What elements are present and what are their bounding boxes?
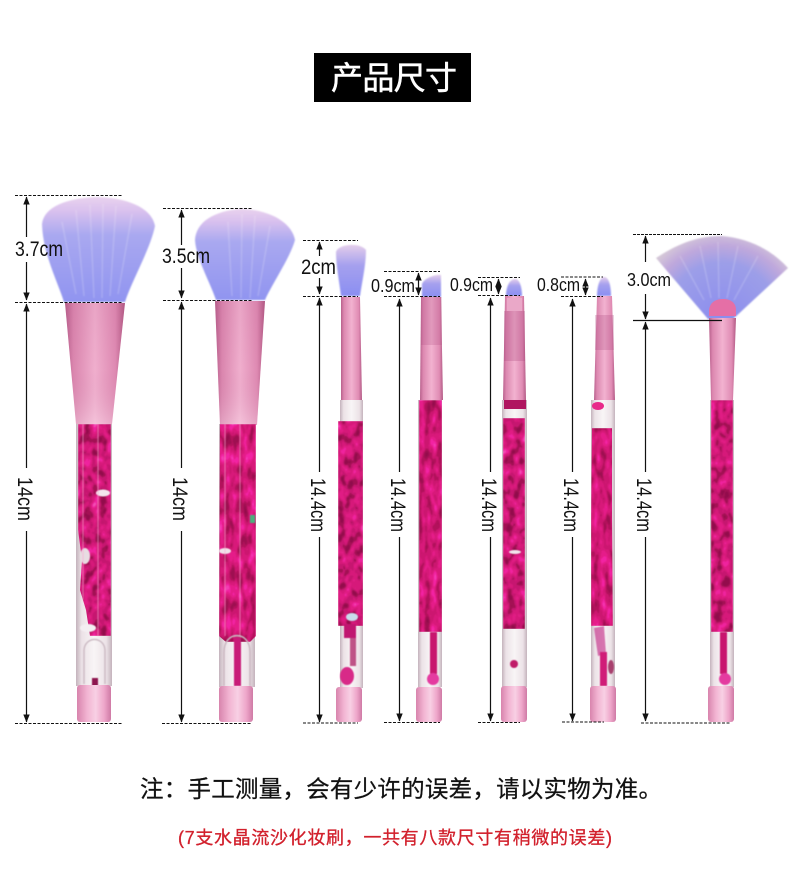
handle ferrule 1 xyxy=(65,303,125,424)
label 0.8cm: 0.8cm xyxy=(537,275,580,295)
brush 3: tapered brush xyxy=(336,245,366,722)
glitter tube 1 xyxy=(76,424,112,686)
brush 5: angled eye brush xyxy=(501,279,527,722)
handle ferrule 4 xyxy=(420,297,443,400)
handle ferrule 3 xyxy=(341,297,362,400)
glitter tube 3 xyxy=(338,400,363,688)
glitter tube 5 xyxy=(502,400,527,687)
end cap 2 xyxy=(219,686,253,722)
handle ferrule 5 xyxy=(503,296,526,400)
label 3.7cm: 3.7cm xyxy=(15,238,63,261)
glitter tube 4 xyxy=(418,400,442,687)
bristles 2 xyxy=(195,209,295,300)
glitter tube 7 xyxy=(710,400,734,687)
label 0.9cm: 0.9cm xyxy=(371,276,415,296)
fan ferrule xyxy=(709,318,736,400)
end cap 6 xyxy=(590,686,616,722)
dimension 3 xyxy=(301,240,358,723)
title xyxy=(314,53,471,102)
end cap 1 xyxy=(77,685,111,722)
glitter tube 6 xyxy=(591,400,615,687)
end cap 7 xyxy=(708,686,734,722)
label 14.4cm: 14.4cm xyxy=(386,478,409,532)
dimension 7 xyxy=(627,234,730,723)
red note text: (7支水晶流沙化妆刷，一共有八款尺寸有稍微的误差) xyxy=(178,828,612,848)
dimension 4 xyxy=(371,272,440,722)
brush 7: fan brush xyxy=(656,236,788,722)
label 14cm: 14cm xyxy=(168,477,191,521)
end cap 4 xyxy=(416,687,442,722)
label 14.4cm: 14.4cm xyxy=(477,478,500,532)
end cap 3 xyxy=(336,687,362,722)
label 3.5cm: 3.5cm xyxy=(162,245,210,268)
label 0.9cm: 0.9cm xyxy=(450,275,493,295)
bristles 6 xyxy=(597,277,611,296)
end cap 5 xyxy=(501,686,527,722)
dimension 6 xyxy=(537,275,604,722)
dimension 5 xyxy=(450,275,520,722)
note text: 注：手工测量，会有少许的误差，请以实物为准。 xyxy=(140,776,662,802)
bristles 3 xyxy=(336,245,366,296)
fan pink tip xyxy=(709,299,736,316)
label 14.4cm: 14.4cm xyxy=(306,478,329,532)
title: 产品尺寸 xyxy=(331,60,457,96)
fan bristles xyxy=(656,236,788,320)
dimension 2 xyxy=(162,208,252,724)
label 14.4cm: 14.4cm xyxy=(559,478,582,532)
glitter tube 2 xyxy=(219,424,256,687)
handle ferrule 2 xyxy=(215,301,265,425)
dimension 1 xyxy=(13,196,123,724)
label 2cm: 2cm xyxy=(301,256,336,279)
brush 2: medium powder brush xyxy=(195,209,295,722)
bristles 5 xyxy=(506,279,522,296)
bristles 4 xyxy=(422,275,441,297)
label 14cm: 14cm xyxy=(13,477,36,521)
label 3.0cm: 3.0cm xyxy=(627,270,671,290)
brush 6: pointed eye brush xyxy=(590,277,616,722)
label 14.4cm: 14.4cm xyxy=(632,478,655,532)
bristles 1 xyxy=(42,197,155,302)
handle ferrule 6 xyxy=(594,296,615,400)
brush 4: flat eye brush xyxy=(416,275,443,722)
brush 1: large powder brush xyxy=(42,197,155,722)
